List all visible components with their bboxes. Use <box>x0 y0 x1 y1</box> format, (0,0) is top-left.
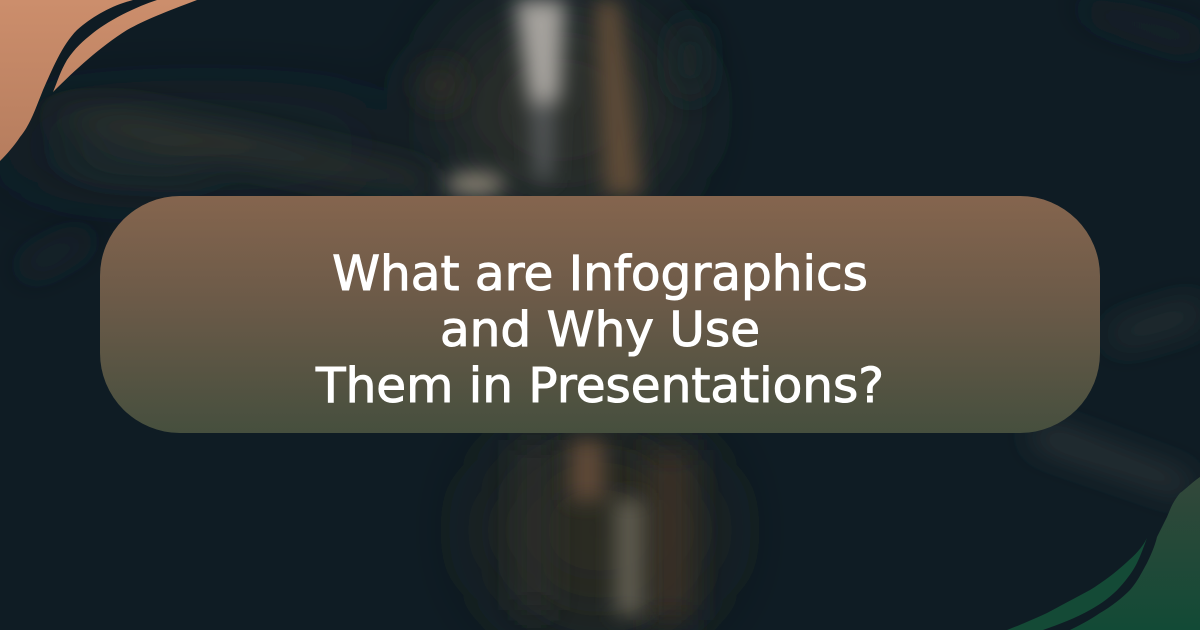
swoosh: bottom-right green <box>1007 477 1200 630</box>
title: and Why Use <box>440 302 760 358</box>
title: Them in Presentations? <box>316 358 884 414</box>
title <box>315 246 884 414</box>
title: What are Infographics <box>332 246 868 302</box>
swoosh: top-left orange <box>0 0 197 161</box>
title pill <box>100 196 1100 433</box>
